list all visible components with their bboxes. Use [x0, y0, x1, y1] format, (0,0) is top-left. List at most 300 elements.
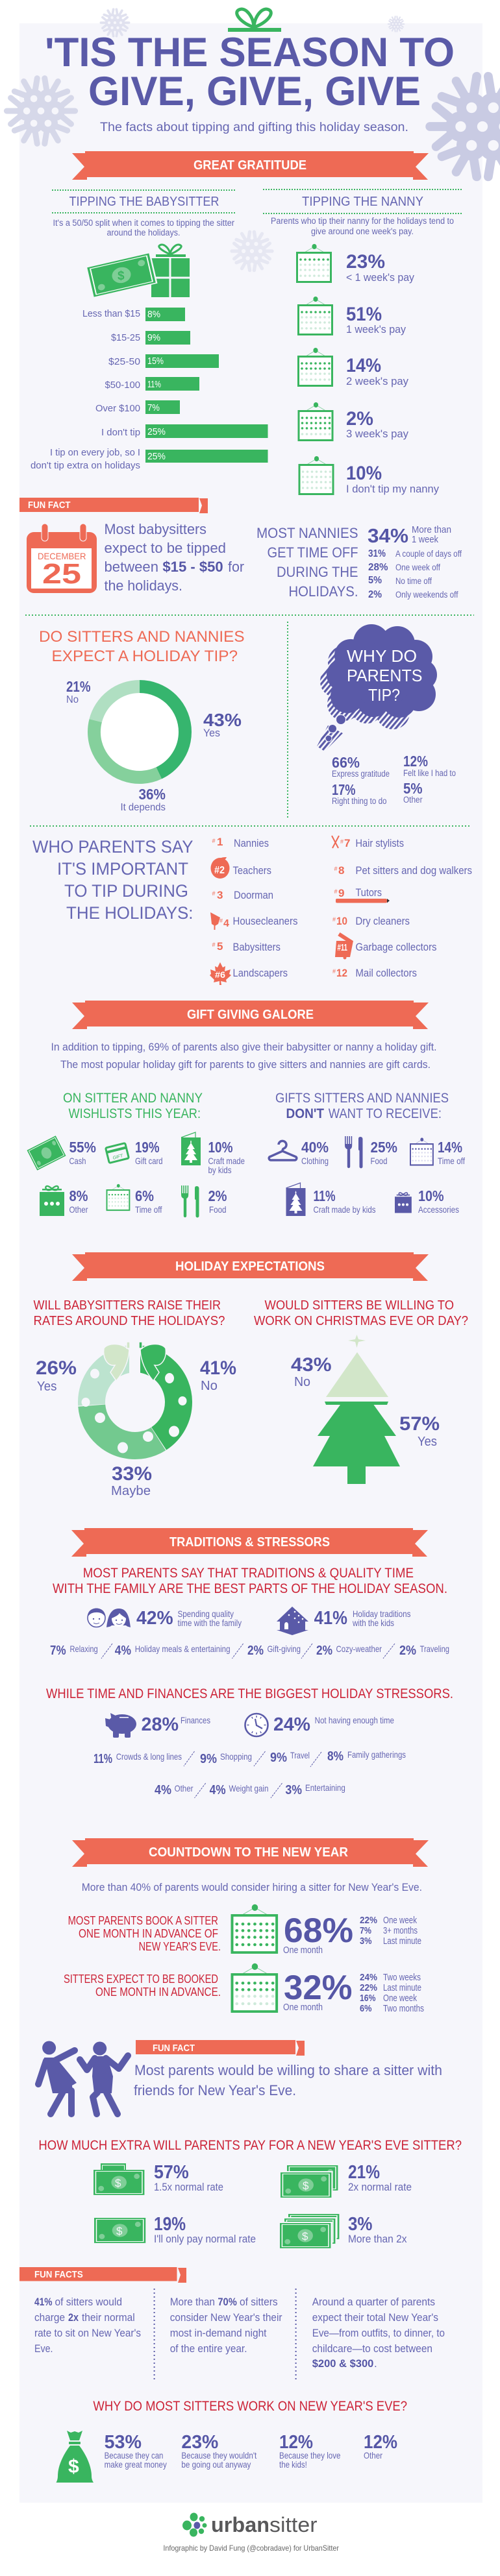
unwanted: clothing: 40%	[301, 1139, 329, 1156]
stat: parents book one month in advance: 3%	[360, 1936, 371, 1947]
panel: tipping the babysitter heading: around the holidays.	[106, 228, 181, 237]
stat: 1.5x normal rate	[94, 2162, 223, 2195]
ranked list: left column: Landscapers	[232, 967, 288, 979]
ranked list: left column: 1	[217, 836, 223, 848]
bar chart: babysitter tips: 11%	[147, 380, 161, 390]
unwanted: clothing: Clothing	[301, 1156, 329, 1166]
tree chart: work on christmas	[291, 1335, 440, 1484]
minor best-parts stats row: 7%	[50, 1644, 66, 1658]
why sitters work stats	[105, 2432, 397, 2470]
fun fact column three: Eve—from outfits, to dinner, to	[312, 2327, 445, 2339]
logo: urbansitter	[182, 2512, 318, 2537]
ranked list: left column: Teachers	[232, 865, 271, 877]
ranked list: right column: Pet sitters and dog walkers	[356, 865, 472, 877]
ranked list: right column: 9	[338, 887, 344, 899]
ranked list: left column: #	[212, 942, 216, 948]
stat: quality time with family: time with the family	[178, 1618, 242, 1628]
panel: tipping the babysitter heading	[52, 190, 236, 237]
nanny stat: two weeks: 14%	[346, 355, 381, 376]
why parents tip stats	[332, 753, 456, 806]
ranked list: left column: Nannies	[234, 838, 269, 849]
heading: work on christmas: WORK ON CHRISTMAS EVE OR DAY?	[254, 1314, 468, 1328]
fun fact column two: consider New Year's their	[170, 2311, 282, 2324]
wishlist: cash: Cash	[69, 1156, 86, 1166]
why parents tip stats: Right thing to do	[332, 796, 387, 806]
stat: holiday traditions: Holiday traditions	[353, 1609, 410, 1619]
stat: not enough time	[245, 1714, 394, 1736]
icon: broom: 4	[223, 918, 229, 929]
stat: 2x normal rate	[279, 2162, 412, 2199]
stat: holiday traditions	[277, 1607, 410, 1635]
ranked list: right column: #	[332, 968, 336, 975]
ranked list: right column	[332, 836, 472, 979]
thought bubble: why do parents tip: WHY DO	[347, 646, 417, 666]
banner: traditions and stressors	[71, 1528, 428, 1557]
fun fact text: nannies time off: HOLIDAYS.	[288, 583, 358, 600]
ranked list: right column: 10	[336, 915, 347, 927]
unwanted: time off	[410, 1137, 465, 1166]
heading: traditions: MOST PARENTS SAY THAT TRADITIONS & QUALITY TIME	[83, 1566, 414, 1581]
stat: parents book one month in advance: 22%	[360, 1915, 377, 1926]
minor stressor stats row one: 9%	[200, 1752, 217, 1766]
decorative snowflakes	[6, 8, 500, 273]
heading: who parents say to tip: THE HOLIDAYS:	[66, 903, 194, 923]
fun fact text: nannies time off: MOST NANNIES	[256, 525, 358, 541]
why sitters work stats: 12%	[364, 2432, 397, 2453]
unwanted: time off: 14%	[438, 1139, 462, 1156]
stat: parents book one month in advance: One month	[283, 1945, 323, 1956]
icon: two people	[38, 2041, 128, 2114]
ranked list: left column: #	[212, 838, 216, 844]
fun fact text: babysitter tips: expect to be tipped	[104, 540, 226, 556]
bar chart: babysitter tips: Over $100	[95, 404, 140, 414]
heading: who parents say to tip: WHO PARENTS SAY	[32, 837, 194, 857]
why parents tip stats: 5%	[403, 780, 422, 797]
wreath chart: raise rates: Maybe	[111, 1484, 151, 1498]
intro text: gift giving	[51, 1041, 436, 1071]
fun fact column one: Eve.	[34, 2342, 53, 2355]
why sitters work stats: Because they love	[279, 2450, 341, 2461]
bar chart: babysitter tips: $50-100	[105, 380, 140, 391]
icon: maple leaf: #6	[215, 969, 225, 980]
icon: money bag: $	[68, 2456, 79, 2477]
icon: garbage bin	[335, 932, 353, 959]
wishlist: craft made by kids: by kids	[208, 1165, 231, 1175]
ranked list: left column: #	[212, 890, 216, 897]
time off stats: No time off	[395, 576, 432, 586]
donut chart: holiday tip expectation: No	[66, 694, 79, 705]
wishlist: gift card: Gift card	[135, 1156, 162, 1166]
ranked list: right column: Tutors	[356, 887, 382, 899]
stat: sitters expect booking one month in advance: ONE MONTH IN ADVANCE.	[95, 1986, 221, 1999]
ranked list: right column: Hair stylists	[356, 838, 404, 849]
icon: december 25 calendar: DECEMBER	[38, 551, 86, 561]
stat: 2x normal rate: 2x normal rate	[348, 2181, 412, 2193]
stat: sitters expect booking one month in advance: 16%	[360, 1993, 375, 2004]
stat: sitters expect booking one month in advance: Two months	[383, 2003, 424, 2014]
ranked list: left column: Babysitters	[232, 942, 281, 953]
ranked list: right column: #	[334, 866, 338, 872]
fun fact column two: More than	[170, 2296, 215, 2308]
donut chart: holiday tip expectation: 21%	[66, 678, 91, 695]
fun fact text: nannies time off: GET TIME OFF	[268, 544, 358, 561]
thought bubble: why do parents tip: TIP?	[368, 685, 400, 705]
heading: gifts not wanted: GIFTS SITTERS AND NANNIES	[275, 1091, 449, 1106]
wishlist: other	[40, 1186, 88, 1216]
intro text: new year: More than 40% of parents would consider hiring a sitter for New Year's Eve.	[82, 1881, 422, 1893]
minor best-parts stats row	[50, 1644, 449, 1659]
wreath chart: raise rates: 41%	[200, 1357, 236, 1379]
banner: holiday expectations: HOLIDAY EXPECTATIONS	[175, 1259, 325, 1274]
wishlist: time off: 6%	[135, 1187, 154, 1204]
heading: who parents say to tip: IT'S IMPORTANT	[57, 859, 188, 879]
fun fact column one: their normal	[82, 2311, 135, 2324]
heading: gifts not wanted	[275, 1091, 449, 1121]
minor best-parts stats row: Holiday meals & entertaining	[135, 1644, 230, 1654]
stat: normal rate: I'll only pay normal rate	[154, 2233, 256, 2245]
ranked list: right column: #	[340, 838, 344, 845]
fun fact column two: 70%	[218, 2296, 237, 2308]
fun fact text: nannies time off: DURING THE	[277, 564, 358, 580]
bar chart: babysitter tips: 25%	[147, 452, 166, 462]
nanny stat: no tip	[299, 456, 439, 495]
bar chart: babysitter tips: 7%	[147, 403, 160, 413]
stat: 1.5x normal rate: 57%	[154, 2162, 189, 2183]
icon: piggy bank	[105, 1713, 136, 1738]
minor stressor stats row one: 9%	[270, 1751, 287, 1765]
stat: not enough time: 24%	[273, 1714, 310, 1735]
fun fact column one: rate to sit on New Year's	[34, 2327, 141, 2339]
wishlist: craft made by kids: Craft made	[208, 1156, 245, 1166]
fun fact column three: $200 & $300	[312, 2357, 373, 2370]
minor stressor stats row one: 11%	[94, 1752, 112, 1766]
icon: apple: #2	[214, 865, 225, 876]
ranked list: right column: 12	[336, 967, 347, 979]
icon: pencil	[336, 899, 390, 903]
wishlist: gift card: GIFT	[112, 1154, 124, 1161]
time off stats: One week off	[395, 563, 440, 572]
ranked list: right column: 8	[338, 864, 344, 877]
tree chart: work on christmas: No	[294, 1375, 310, 1389]
fun fact column three	[312, 2296, 445, 2370]
wreath chart: raise rates: 26%	[36, 1357, 77, 1379]
nanny stat: no tip: I don't tip my nanny	[346, 483, 439, 495]
unwanted: craft made by kids	[286, 1183, 375, 1216]
minor best-parts stats row: 2%	[399, 1644, 416, 1658]
heading: do sitters expect a tip: DO SITTERS AND NANNIES	[39, 628, 244, 646]
wishlist: food: 2%	[208, 1187, 227, 1204]
banner: great gratitude: GREAT GRATITUDE	[194, 158, 306, 173]
stat: sitters expect booking one month in advance: 24%	[360, 1972, 377, 1983]
ranked list: left column: Doorman	[234, 890, 273, 901]
tree chart: work on christmas: 43%	[291, 1354, 332, 1376]
bar chart: babysitter tips: 9%	[147, 333, 160, 343]
heading: wishlists: WISHLISTS THIS YEAR:	[69, 1106, 201, 1121]
stat: parents book one month in advance: One week	[383, 1915, 417, 1926]
heading: work on christmas: WOULD SITTERS BE WILLING TO	[265, 1298, 454, 1313]
fun fact text: share a sitter	[134, 2062, 442, 2098]
time off stats: 34%	[368, 524, 408, 547]
panel: tipping the babysitter heading: It's a 50/50 split when it comes to tipping the sitter	[53, 218, 234, 228]
minor best-parts stats row: 2%	[247, 1644, 264, 1658]
banner: holiday expectations	[72, 1252, 429, 1281]
heading: wishlists: ON SITTER AND NANNY	[63, 1091, 203, 1106]
donut chart: holiday tip expectation	[66, 672, 242, 813]
minor best-parts stats row: 2%	[316, 1644, 332, 1658]
nanny stat: under one week: < 1 week's pay	[346, 271, 414, 284]
fun fact column one	[34, 2296, 141, 2355]
heading: traditions: WITH THE FAMILY ARE THE BEST PARTS OF THE HOLIDAY SEASON.	[53, 1581, 447, 1596]
title: 'TIS THE SEASON TO	[45, 30, 455, 75]
fun fact column one: charge	[34, 2311, 65, 2324]
minor stressor stats row one: Shopping	[220, 1751, 252, 1762]
minor stressor stats row one: 8%	[327, 1749, 344, 1764]
minor best-parts stats row: Traveling	[420, 1644, 449, 1654]
stat: parents book one month in advance: 7%	[360, 1925, 371, 1936]
fun fact text: share a sitter: Most parents would be willing to share a sitter with	[134, 2062, 442, 2078]
banner: gift giving galore	[72, 1001, 429, 1029]
ranked list: right column: Garbage collectors	[356, 942, 436, 953]
bar chart: babysitter tips: 25%	[147, 427, 166, 437]
nanny stat: one week: 1 week's pay	[346, 323, 406, 335]
stat: not enough time: Not having enough time	[315, 1715, 394, 1725]
panel: tipping the nanny heading: give around one week's pay.	[311, 226, 414, 236]
time off stats: A couple of days off	[395, 549, 462, 559]
minor stressor stats row two: Entertaining	[305, 1782, 345, 1793]
heading: raise rates: RATES AROUND THE HOLIDAYS?	[34, 1314, 225, 1328]
fun fact tag	[19, 498, 208, 513]
stat: 2x normal rate: $	[303, 2180, 309, 2192]
stat: parents book one month in advance: 68%	[284, 1912, 353, 1950]
heading: work on christmas	[254, 1298, 468, 1328]
donut chart: holiday tip expectation: Yes	[203, 727, 220, 739]
wishlist: cash	[27, 1136, 96, 1171]
stat: quality time with family: Spending quality	[178, 1609, 234, 1619]
minor stressor stats row two: 4%	[210, 1783, 226, 1797]
fun fact column two: most in-demand night	[170, 2327, 267, 2339]
unwanted: food	[345, 1136, 397, 1168]
icon: apple	[210, 857, 230, 879]
minor stressor stats row two: Weight gain	[229, 1783, 268, 1793]
panel: tipping the babysitter heading: TIPPING THE BABYSITTER	[69, 195, 219, 209]
fun facts tag	[19, 2267, 186, 2283]
nanny stat: one week: 51%	[346, 304, 382, 325]
donut chart: holiday tip expectation: It depends	[121, 802, 166, 813]
minor best-parts stats row: Gift-giving	[268, 1644, 301, 1654]
logo: urbansitter: sitter	[269, 2513, 318, 2536]
donut chart: holiday tip expectation: 43%	[203, 710, 242, 730]
wreath chart: raise rates: Yes	[37, 1379, 56, 1394]
minor stressor stats row two: 3%	[285, 1783, 302, 1797]
icon: december 25 calendar	[27, 524, 97, 593]
unwanted: accessories	[395, 1187, 459, 1215]
intro text: gift giving: In addition to tipping, 69% of parents also give their babysitter or nanny a holiday gift.	[51, 1041, 436, 1053]
stat: more than 2x	[279, 2214, 407, 2249]
nanny stat: two weeks: 2 week's pay	[346, 375, 408, 387]
why sitters work stats: make great money	[105, 2459, 167, 2470]
why sitters work stats: 23%	[181, 2432, 219, 2453]
time off stats: More than	[412, 524, 451, 535]
stat: normal rate	[94, 2214, 256, 2245]
time off stats: 28%	[368, 562, 388, 573]
heading: who parents say to tip: TO TIP DURING	[64, 881, 188, 901]
stat: normal rate: $	[116, 2225, 123, 2237]
heading: do sitters expect a tip	[39, 628, 244, 665]
stat: finances: 28%	[142, 1714, 179, 1735]
wishlist: craft made by kids	[181, 1132, 245, 1175]
fun fact column two: of sitters	[240, 2296, 278, 2308]
fun fact text: babysitter tips: Most babysitters	[104, 521, 206, 537]
fun fact column one: 41%	[34, 2296, 52, 2308]
fun fact text: babysitter tips: for	[228, 559, 244, 575]
stat: more than 2x: $	[302, 2230, 308, 2242]
stat: sitters expect booking one month in advance: Two weeks	[383, 1972, 421, 1983]
stat: parents book one month in advance	[68, 1904, 421, 1956]
stat: more than 2x: More than 2x	[348, 2233, 407, 2245]
stat: parents book one month in advance: Last minute	[383, 1936, 421, 1947]
icon: gift bow	[228, 9, 281, 32]
minor stressor stats row one	[94, 1749, 406, 1767]
time off stats: 5%	[368, 575, 382, 586]
stat: sitters expect booking one month in advance: One week	[383, 1993, 417, 2004]
ranked list: right column: Dry cleaners	[356, 916, 410, 927]
ranked list: left column	[210, 836, 297, 985]
stat: sitters expect booking one month in advance: Last minute	[383, 1982, 421, 1993]
ranked list: right column: #	[332, 916, 336, 923]
bar chart: babysitter tips	[31, 308, 268, 471]
bar chart: babysitter tips: 8%	[147, 310, 160, 320]
icon: maple leaf	[210, 962, 231, 985]
stat: holiday traditions: with the kids	[352, 1618, 394, 1628]
icon: december 25 calendar: 25	[42, 558, 81, 590]
stat: finances: Finances	[181, 1715, 210, 1725]
wishlist: food	[181, 1185, 227, 1217]
minor stressor stats row two	[155, 1782, 345, 1798]
wreath chart: raise rates	[36, 1337, 236, 1498]
panel: tipping the nanny heading	[263, 189, 462, 236]
wishlist: food: Food	[209, 1204, 226, 1215]
ranked list: left column: 5	[217, 940, 223, 953]
why sitters work stats: be going out anyway	[181, 2459, 251, 2470]
why sitters work stats: Because they can	[105, 2450, 163, 2461]
donut chart: holiday tip expectation: 36%	[139, 786, 166, 803]
nanny stat: three weeks	[299, 402, 408, 440]
why parents tip stats: 17%	[332, 781, 356, 798]
time off stats	[368, 524, 462, 600]
stat: sitters expect booking one month in advance: One month	[283, 2002, 323, 2013]
stat: normal rate: 19%	[154, 2214, 186, 2235]
fun fact column three: childcare—to cost between	[312, 2342, 432, 2355]
stat: 1.5x normal rate: $	[115, 2177, 121, 2189]
ranked list: right column: 7	[344, 837, 350, 849]
stat: sitters expect booking one month in advance	[64, 1963, 424, 2014]
fun fact text: share a sitter: friends for New Year's Eve.	[134, 2082, 296, 2098]
why sitters work stats: the kids!	[279, 2459, 307, 2470]
wishlist: other: Other	[69, 1204, 88, 1215]
bar chart: babysitter tips: I don't tip	[101, 428, 140, 438]
icon: broom	[210, 912, 229, 930]
fun fact tag: FUN FACT	[28, 500, 70, 511]
stat: sitters expect booking one month in advance: 22%	[360, 1982, 377, 1993]
minor stressor stats row two: 4%	[155, 1783, 171, 1797]
why sitters work stats: Because they wouldn't	[181, 2450, 256, 2461]
nanny stat: under one week: 23%	[346, 251, 385, 273]
stat: quality time with family	[88, 1608, 242, 1629]
fun fact column one: of sitters would	[55, 2296, 122, 2308]
nanny stat: three weeks: 3 week's pay	[346, 428, 408, 440]
wishlist: gift card	[106, 1139, 162, 1166]
why parents tip stats: Other	[403, 795, 423, 805]
fun fact column two	[170, 2296, 282, 2355]
heading: raise rates	[34, 1298, 225, 1328]
stat: parents book one month in advance: NEW YEAR'S EVE.	[139, 1940, 221, 1953]
tree chart: work on christmas: Yes	[418, 1435, 437, 1449]
time off stats: Only weekends off	[395, 590, 458, 600]
minor best-parts stats row: 4%	[115, 1644, 131, 1658]
why sitters work stats: 12%	[279, 2432, 313, 2453]
thought bubble: why do parents tip: PARENTS	[347, 666, 422, 685]
unwanted: accessories: 10%	[418, 1187, 444, 1204]
stat: 1.5x normal rate: 1.5x normal rate	[154, 2181, 223, 2193]
fun fact text: babysitter tips	[104, 521, 244, 594]
nanny stat: three weeks: 2%	[346, 408, 373, 430]
panel: tipping the nanny heading: Parents who tip their nanny for the holidays tend to	[271, 216, 454, 226]
icon: clock	[245, 1714, 268, 1736]
bar chart: babysitter tips: $25-50	[108, 357, 140, 367]
icon: gift box and dollar bill	[85, 245, 190, 298]
nanny stat: under one week	[297, 244, 414, 284]
stat: 2x normal rate: 21%	[348, 2162, 380, 2183]
intro text: gift giving: The most popular holiday gift for parents to give sitters and nannies are gift cards.	[60, 1058, 431, 1071]
stat: holiday traditions: 41%	[314, 1608, 347, 1629]
why parents tip stats: Express gratitude	[332, 769, 390, 779]
fun fact column three: expect their total New Year's	[312, 2311, 438, 2324]
minor stressor stats row one: Travel	[290, 1750, 310, 1760]
stat: sitters expect booking one month in advance: SITTERS EXPECT TO BE BOOKED	[64, 1973, 218, 1986]
stat: parents book one month in advance: 3+ months	[383, 1925, 418, 1936]
subtitle: The facts about tipping and gifting this holiday season.	[100, 121, 408, 134]
heading: wishlists	[63, 1091, 203, 1121]
title: GIVE, GIVE, GIVE	[88, 69, 421, 114]
nanny stat: two weeks	[299, 348, 408, 387]
banner: countdown	[72, 1838, 429, 1867]
wreath chart: raise rates: 33%	[112, 1463, 152, 1485]
icon: gift box and dollar bill: $	[118, 269, 125, 283]
logo: urbansitter: urban	[211, 2513, 269, 2536]
wishlist: craft made by kids: 10%	[208, 1139, 232, 1156]
fun fact text: babysitter tips: the holidays.	[104, 577, 182, 594]
wishlist: cash: 55%	[69, 1139, 96, 1156]
wishlist: gift card: 19%	[135, 1139, 160, 1156]
time off stats: 2%	[368, 589, 382, 600]
stat: parents book one month in advance: ONE MONTH IN ADVANCE OF	[79, 1927, 218, 1940]
tree chart: work on christmas: 57%	[399, 1413, 440, 1435]
fun fact text: babysitter tips: between	[104, 559, 158, 575]
minor stressor stats row two: Other	[175, 1783, 194, 1793]
wishlist: time off: Time off	[135, 1204, 162, 1215]
banner: countdown: COUNTDOWN TO THE NEW YEAR	[149, 1845, 349, 1860]
ranked list: right column: #	[334, 888, 338, 895]
fun facts tag: FUN FACTS	[34, 2269, 83, 2280]
unwanted: food: Food	[370, 1156, 387, 1166]
heading: who parents say to tip	[32, 837, 194, 923]
thought bubble: why do parents tip	[317, 624, 437, 751]
bar chart: babysitter tips: I tip on every job, so I	[50, 448, 140, 458]
unwanted: craft made by kids: 11%	[313, 1187, 335, 1204]
stat: finances	[105, 1713, 210, 1738]
unwanted: accessories: Accessories	[418, 1204, 459, 1215]
wishlist: other: 8%	[69, 1187, 88, 1204]
